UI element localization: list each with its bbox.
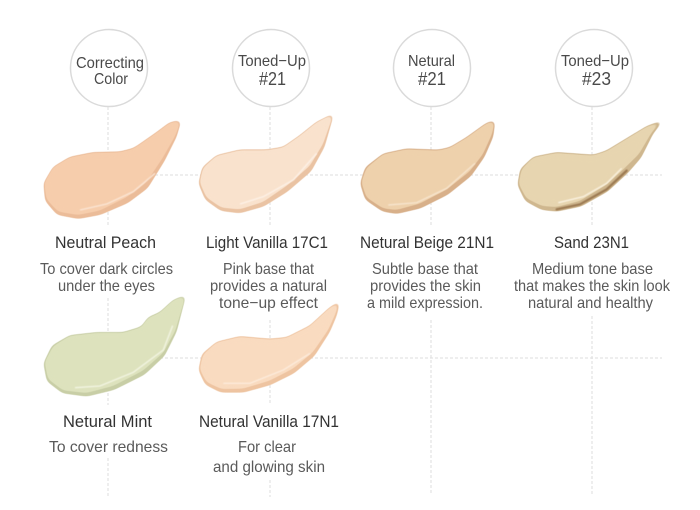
label: Neutral Peach — [40, 233, 173, 295]
label: Neutral Peach: under the eyes — [58, 278, 155, 295]
circle: Correcting Color — [70, 30, 148, 106]
label: Neutral Peach: To cover dark circles — [40, 261, 173, 278]
circle: Correcting Color: Color — [94, 71, 129, 88]
swatch: Neutral Peach — [44, 120, 181, 218]
label: Light Vanilla 17C1: Pink base that — [223, 261, 314, 278]
label: Sand 23N1: Sand 23N1 — [554, 233, 629, 252]
label: Netural Beige 21N1 — [360, 233, 494, 312]
circle: Toned-Up #23 — [556, 30, 632, 106]
circle: Toned-Up #21: Toned−Up — [238, 53, 306, 70]
circle: Toned-Up #23: Toned−Up — [561, 53, 629, 70]
label: Light Vanilla 17C1 — [206, 233, 328, 312]
label: Netural Beige 21N1: provides the skin — [370, 278, 481, 295]
label: Netural Beige 21N1: Subtle base that — [372, 261, 479, 278]
label: Netural Beige 21N1: a mild expression. — [367, 295, 483, 312]
label: Light Vanilla 17C1: tone−up effect — [219, 295, 319, 312]
label: Netural Vanilla 17N1: For clear — [238, 439, 297, 456]
label: Sand 23N1: that makes the skin look — [514, 278, 671, 295]
label: Netural Vanilla 17N1: Netural Vanilla 17N1 — [199, 412, 339, 431]
label: Netural Mint: Netural Mint — [63, 412, 152, 431]
circle: Toned-Up #21 — [232, 30, 310, 106]
label: Sand 23N1: natural and healthy — [528, 295, 653, 312]
circle: Toned-Up #23: #23 — [582, 69, 611, 89]
label: Light Vanilla 17C1: Light Vanilla 17C1 — [206, 233, 328, 252]
swatch: Netural Mint — [44, 295, 186, 396]
label: Light Vanilla 17C1: provides a natural — [210, 278, 327, 295]
swatch: Sand 23N1 — [518, 120, 663, 211]
label: Netural Beige 21N1: Netural Beige 21N1 — [360, 233, 494, 252]
circle: Correcting Color: Correcting — [76, 55, 144, 72]
label: Netural Vanilla 17N1: and glowing skin — [213, 459, 325, 476]
label: Sand 23N1: Medium tone base — [532, 261, 653, 278]
label: Sand 23N1 — [514, 233, 671, 312]
circle: Netural #21: Netural — [408, 53, 455, 70]
label: Netural Vanilla 17N1 — [199, 412, 339, 476]
label: Netural Mint — [49, 412, 168, 456]
label: Netural Mint: To cover redness — [49, 439, 168, 456]
circle: Netural #21 — [394, 30, 470, 106]
label: Neutral Peach: Neutral Peach — [55, 233, 156, 252]
circle: Toned-Up #21: #21 — [259, 69, 286, 89]
circle: Netural #21: #21 — [418, 69, 446, 89]
swatch: Light Vanilla 17C1 — [199, 114, 334, 213]
swatch: Netural Vanilla 17N1 — [199, 301, 340, 392]
swatch: Netural Beige 21N1 — [361, 120, 495, 213]
